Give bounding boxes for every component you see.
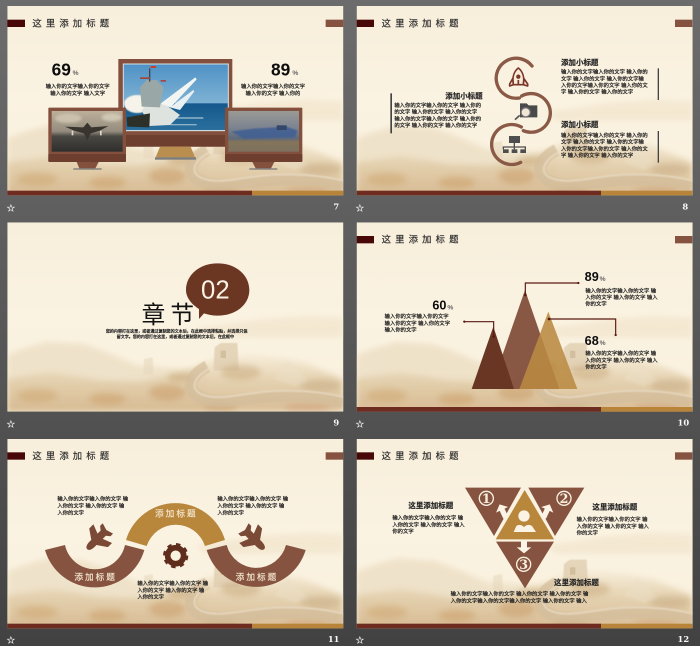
slide 10: triangle chart [355,222,693,431]
stat 89% with text: 入你的文字 输入你的文字 输入 [585,293,658,301]
bottom text [137,579,209,601]
right text block 2: 字 输入你的文字 输入你的文字 [561,151,633,159]
stat 68% with text: 68 [585,334,599,348]
left text block: 添加小标题 [445,90,483,100]
slide title: 这里添加标题 [32,17,113,28]
slide title: 这里添加标题 [32,450,113,461]
right description: 输入你的文字输入你的文字 [241,82,305,90]
right text block: 入你的文字 输入你的文字 输入 [577,522,650,530]
stat 89% with text: 输入你的文字输入你的文字 输 [585,286,657,294]
header left bar [357,20,374,27]
bottom text block: 入你的文字输入你的文字输入你的文字 输入你的文字 输入 [451,596,588,604]
star mark: ☆ [355,204,364,215]
icon: person [514,510,536,532]
left description: 输入你的文字输入你的文字 [46,82,110,90]
triangle 68% [519,312,577,389]
page number: 8 [682,202,688,212]
left text block: 这里添加标题 [408,500,454,510]
icon: plane right [234,519,274,559]
top left text: 入你的文字 [57,508,84,516]
top right text [217,495,289,516]
top left text: 入你的文字 输入你的文字 输 [57,502,125,510]
right text block 2: 文字 输入你的文字 输入你的文字输 [561,138,645,146]
slide 12: triangle diagram [355,439,693,646]
header left bar [357,452,374,460]
left text block: 的文字 输入你的文字 输入你的文字 [394,108,477,116]
stat 68% with text: 入你的文字 输入你的文字 输入 [585,356,658,364]
stat 68% with text: 你的文字 [585,363,607,371]
triangle 89% [491,290,559,389]
star mark: ☆ [355,420,364,431]
triangle 60% [472,327,514,389]
footer bar dark [7,624,252,628]
header right bar [326,452,343,460]
left text block [392,500,465,535]
slide 11: wave arcs [6,439,343,646]
bottom text: 入你的文字 [137,593,164,601]
slide background with landscape [7,6,343,195]
arc labels: 添加标题 [74,571,117,582]
star mark: ☆ [6,204,15,215]
stat 68% with text: 输入你的文字输入你的文字 输 [585,349,657,357]
chapter description [106,327,247,339]
icon: plane left [78,519,117,559]
right text block 2: 输入你的文字输入你的文字 输入你的 [561,131,648,139]
page number: 11 [328,634,339,644]
arrow down [517,541,531,553]
footer bar dark [357,624,601,628]
slide title: 这里添加标题 [382,450,463,461]
star mark: ☆ [6,420,15,431]
stat 89% with text: 你的文字 [585,300,607,308]
right text block 1: 入你的文字输入你的文字 输入你的文 [561,81,648,89]
header right bar [675,20,692,27]
slide background with landscape [357,6,693,195]
top left text: 输入你的文字输入你的文字 输 [57,495,129,503]
footer bar gold [601,407,692,412]
right arc [207,545,306,587]
right text block 2: 入你的文字输入你的文字 输入你的文 [561,144,648,152]
arrow up-right [538,502,556,520]
footer bar gold [252,624,343,628]
stat 60% with text: 输入你的文字 输入你的文字 [385,319,450,327]
stat 60% with text: 输入你的文字输入你的文字 [385,312,449,320]
left text block: 你的文字 [392,527,414,535]
stat left 69%: % [73,70,79,77]
slide background with landscape [7,222,343,412]
icon: organisation chart [503,136,526,153]
stat 60% with text [385,299,453,334]
ring arcs [492,58,550,164]
left description [46,82,110,97]
speech bubble with 02 [186,263,249,319]
slide title: 这里添加标题 [382,17,463,28]
triangle 1 with number [465,488,521,536]
header right bar [675,452,692,460]
triangle 1 with number: 1 [482,491,491,506]
right text block: 这里添加标题 [592,502,638,512]
header right bar [675,236,692,243]
triangle 2 with number: 2 [560,491,568,506]
bottom text block: 输入你的文字输入你的文字 输入你的文字 输入你的文字 输 [451,590,589,598]
left text block: 输入你的文字输入你的文字 输入你的 [394,114,481,122]
callout line 89% [524,282,579,296]
footer bar dark [357,191,601,195]
icon: gear [164,544,187,567]
right text block [577,502,650,537]
chapter description: 留文字。您的内容打在这里，或者通过复制您的文本后，在此框中 [117,333,234,339]
left text block: 输入你的文字输入你的文字 输 [392,513,464,521]
right description: 输入你的文字 输入你的 [246,89,300,97]
right text block 1: 字 输入你的文字 输入你的文字 [561,88,633,96]
right text block: 输入你的文字输入你的文字 输 [577,515,648,523]
right monitor with tank photo [225,108,302,170]
left text block: 的文字 输入你的文字 输入你的文字 [394,121,477,129]
footer bar gold [601,191,692,195]
bottom text block [451,577,599,604]
arc labels: 添加标题 [155,508,198,519]
right text block 1: 文字 输入你的文字 输入你的文字输 [561,74,645,82]
triangle 2 with number [528,488,584,536]
stat right 89%: 89 [271,59,290,79]
stat 68% with text [585,334,658,371]
left description: 输入你的文字 输入文字 [50,89,105,97]
page number: 9 [333,418,339,428]
page number: 10 [678,418,689,428]
triangle 3 with number [496,542,554,588]
left bar [390,93,392,133]
icon: rocket [510,68,528,86]
chapter description: 您的内容打在这里，或者通过复制您的文本后，在此框中选择粘贴，并选择只保 [106,327,247,333]
stat left 69%: 69 [52,59,71,79]
header right bar [326,20,343,27]
bottom text block: 这里添加标题 [554,577,599,587]
icon: camera folder with magnifier [515,103,537,120]
callout line 60% [463,320,495,338]
right text block 2: 添加小标题 [561,119,599,129]
stat 68% with text: % [600,340,606,347]
stat 89% with text [585,270,658,308]
slide 8: three rings [355,6,693,215]
top right text: 输入你的文字输入你的文字 输 [217,495,289,503]
stat 60% with text: 60 [432,299,446,313]
header left bar [7,452,25,460]
top right text: 入你的文字 输入你的文字 输 [217,502,285,510]
slide 7: monitors [6,6,343,215]
slide background with landscape [357,222,693,412]
stat right 89%: % [292,70,298,77]
page number: 7 [333,202,339,212]
footer bar gold [601,624,692,628]
footer bar dark [357,407,601,412]
arc labels: 添加标题 [236,571,278,582]
bottom text: 输入你的文字输入你的文字 输 [137,579,209,587]
right bar 2 [658,131,659,163]
left text block [394,90,483,129]
arc labels [74,508,278,582]
chapter heading: 章节 [142,302,199,329]
left text block: 入你的文字 输入你的文字 输入 [392,520,465,528]
top left text [57,495,129,516]
center monitor with ship photo [118,59,232,160]
left arc [45,545,144,587]
header left bar [357,236,374,243]
top right text: 入你的文字 [217,508,244,516]
bottom text: 入你的文字 输入你的文字 输 [137,586,205,594]
slide background with landscape [7,439,343,628]
slide background with landscape [357,439,693,628]
footer bar dark [7,191,252,195]
right text block 2 [561,119,648,159]
right description [241,82,305,97]
center triangle [496,490,554,539]
footer bar gold [252,191,343,195]
left text block: 输入你的文字输入你的文字 输入你的 [394,101,481,109]
left monitor with jet photo [48,108,126,170]
speech bubble with 02: 02 [201,277,230,305]
right text block 1: 输入你的文字输入你的文字 输入你的 [561,68,648,76]
stat 89% with text: 89 [585,270,599,284]
stat 60% with text: % [447,305,453,312]
stat 89% with text: % [600,276,606,283]
slide 9: chapter cover [6,222,343,431]
right text block 1: 添加小标题 [561,57,599,67]
right text block: 你的文字 [577,529,598,537]
page number: 12 [678,634,689,644]
right bar 1 [658,68,659,100]
arrow up-left [494,502,512,520]
triangle 3 with number: 3 [519,557,528,572]
stat 60% with text: 输入你的文字 [385,326,417,334]
header left bar [7,20,25,27]
slide title: 这里添加标题 [382,234,463,245]
center arc [126,503,225,546]
right text block 1 [561,57,648,96]
callout line 68% [548,318,617,336]
